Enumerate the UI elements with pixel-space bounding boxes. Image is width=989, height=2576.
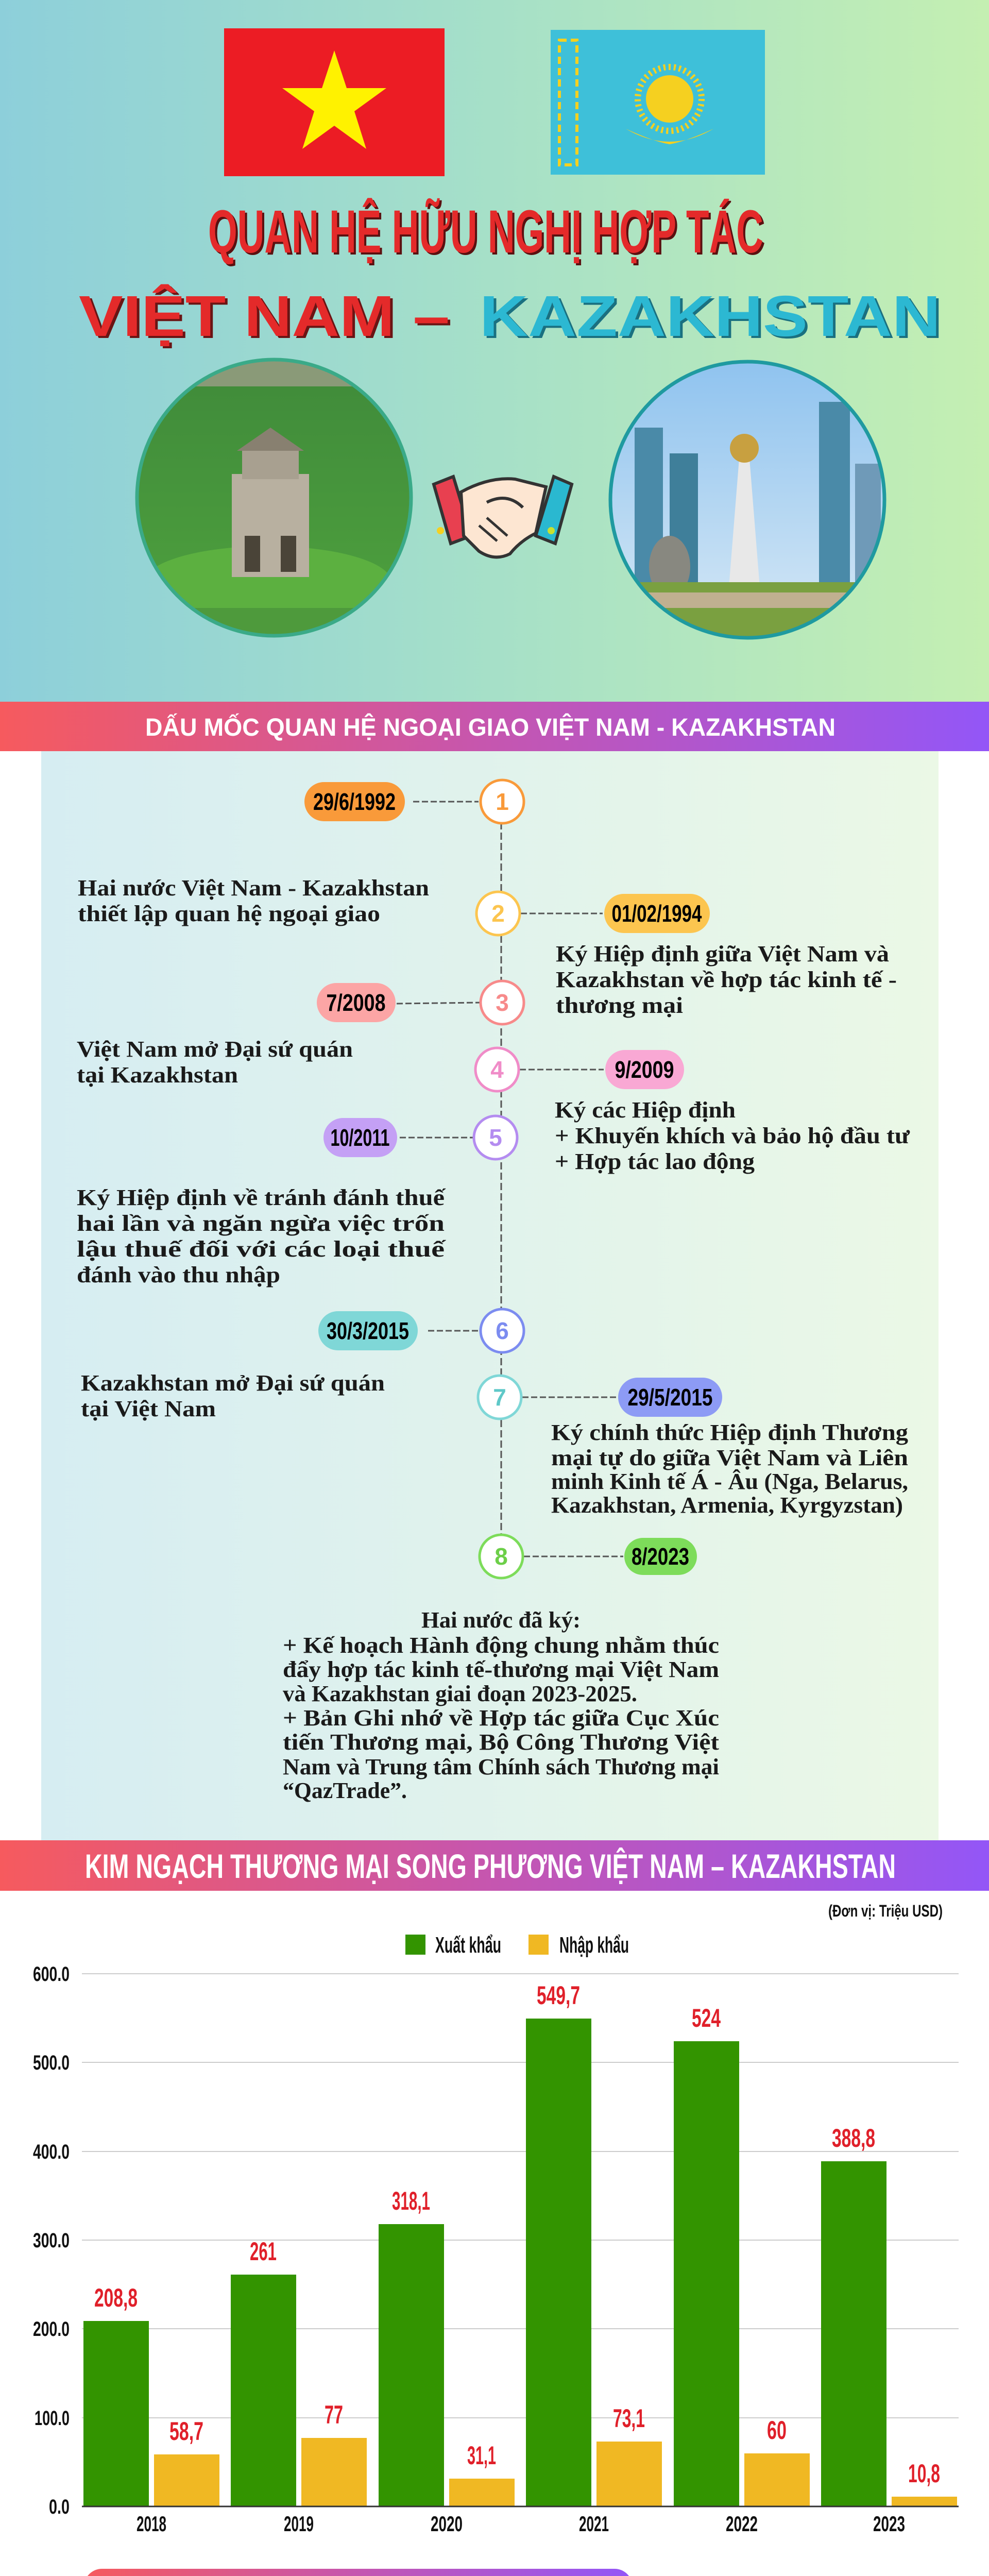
milestone 2 — [476, 892, 897, 1018]
milestone 8: + Kế hoạch Hành động chung nhằm thúc — [283, 1633, 719, 1658]
legend: Nhập khẩu — [559, 1933, 629, 1958]
bar chart: trade: 600.0 — [33, 1963, 70, 1986]
milestone 8: tiến Thương mại, Bộ Công Thương Việt — [283, 1730, 719, 1755]
title line 2 — [79, 284, 943, 350]
milestone 1: 1 — [496, 788, 509, 815]
header band: trade — [0, 1840, 989, 1891]
bar chart: trade: 549,7 — [537, 1981, 580, 2010]
milestone 2: Kazakhstan về hợp tác kinh tế - — [556, 967, 897, 992]
background: header gradient — [0, 0, 989, 702]
bar chart: trade: 2018 — [137, 2512, 166, 2536]
milestone 1 — [78, 780, 524, 926]
milestone 4: 4 — [490, 1056, 504, 1083]
milestone 7 — [478, 1376, 908, 1518]
milestone 8: 8/2023 — [632, 1543, 689, 1570]
bar chart: trade: 2020 — [431, 2512, 463, 2536]
bar chart: trade: 2019 — [284, 2512, 314, 2536]
milestone 3: 7/2008 — [327, 989, 385, 1016]
header band: milestones — [0, 702, 989, 751]
milestone 3: Việt Nam mở Đại sứ quán — [77, 1037, 353, 1062]
milestone 8: “QazTrade”. — [283, 1778, 407, 1803]
bar chart: trade: 388,8 — [832, 2124, 875, 2153]
bar chart: trade: 200.0 — [33, 2318, 70, 2341]
milestone 2: thương mại — [556, 993, 683, 1018]
milestone 8 — [283, 1535, 719, 1803]
milestone 1: 29/6/1992 — [313, 788, 396, 815]
milestone 7: minh Kinh tế Á - Âu (Nga, Belarus, — [551, 1469, 908, 1494]
photo: Astana skyline — [608, 361, 889, 639]
milestone 5: đánh vào thu nhập — [77, 1262, 280, 1287]
bar chart: trade: 60 — [767, 2416, 787, 2445]
milestone 4: 9/2009 — [615, 1056, 674, 1083]
photo: Hoan Kiem lake — [134, 355, 415, 649]
milestone 3: 3 — [496, 989, 509, 1016]
milestone 4: + Khuyến khích và bảo hộ đầu tư — [555, 1123, 910, 1148]
milestone 5 — [77, 1116, 517, 1287]
milestone 7: mại tự do giữa Việt Nam và Liên — [551, 1445, 908, 1470]
bar chart: trade: 0.0 — [49, 2496, 70, 2518]
header band: milestones: DẤU MỐC QUAN HỆ NGOẠI GIAO VIỆT NAM - KAZAKHSTAN — [145, 713, 835, 741]
milestone 1: thiết lập quan hệ ngoại giao — [78, 901, 380, 926]
milestone 5: Ký Hiệp định về tránh đánh thuế — [77, 1185, 446, 1210]
bar chart: trade: 10,8 — [908, 2459, 940, 2488]
milestone 8: đẩy hợp tác kinh tế-thương mại Việt Nam — [283, 1657, 719, 1682]
bar chart: trade: 318,1 — [392, 2187, 430, 2215]
milestone 7: 7 — [493, 1384, 506, 1411]
milestone 8: Hai nước đã ký: — [421, 1607, 581, 1633]
flag: Vietnam — [224, 28, 445, 176]
milestone 5: 10/2011 — [331, 1124, 389, 1151]
panel: timeline — [41, 751, 939, 1840]
milestone 6: 6 — [496, 1317, 509, 1344]
legend: Xuất khẩu — [435, 1933, 501, 1958]
milestone 6: Kazakhstan mở Đại sứ quán — [81, 1370, 385, 1396]
title line 2: KAZAKHSTAN — [482, 286, 943, 350]
bar chart: trade: (Đơn vị: Triệu USD) — [828, 1902, 943, 1920]
milestone 1: Hai nước Việt Nam - Kazakhstan — [78, 875, 429, 901]
title line 2: VIỆT NAM – — [81, 286, 452, 350]
milestone 6: 30/3/2015 — [327, 1317, 409, 1344]
bar chart: trade — [33, 1902, 959, 2536]
milestone 8: và Kazakhstan giai đoạn 2023-2025. — [283, 1681, 637, 1706]
bar chart: trade: 2022 — [726, 2512, 758, 2536]
milestone 2: 01/02/1994 — [612, 900, 702, 927]
bar chart: trade: 524 — [692, 2004, 721, 2032]
milestone 6: tại Việt Nam — [81, 1396, 216, 1421]
bar chart: trade: 58,7 — [169, 2417, 203, 2446]
milestone 7: Kazakhstan, Armenia, Kyrgyzstan) — [551, 1493, 903, 1518]
bar chart: trade: 300.0 — [33, 2229, 70, 2252]
milestone 5: hai lần và ngăn ngừa việc trốn — [77, 1211, 445, 1236]
panel: exports — [42, 2569, 975, 2576]
milestone 8: 8 — [494, 1543, 508, 1570]
milestone 8: + Bản Ghi nhớ về Hợp tác giữa Cục Xúc — [283, 1705, 719, 1731]
bar chart: trade: 400.0 — [33, 2141, 70, 2163]
milestone 2: Ký Hiệp định giữa Việt Nam và — [556, 941, 889, 967]
milestone 4 — [475, 1048, 910, 1174]
bar chart: trade: 208,8 — [94, 2283, 138, 2312]
bar chart: trade: 31,1 — [467, 2441, 496, 2470]
pill: exports heading — [84, 2569, 633, 2576]
bar chart: trade: 100.0 — [35, 2407, 70, 2430]
bar chart: trade: 77 — [325, 2400, 343, 2429]
milestone 4: Ký các Hiệp định — [555, 1097, 736, 1123]
milestone 3 — [77, 981, 524, 1088]
title line 1 — [208, 197, 765, 268]
bar chart: trade: 2021 — [579, 2512, 609, 2536]
milestone 2: 2 — [491, 900, 505, 927]
title line 2: KAZAKHSTAN — [480, 284, 941, 348]
flag: Kazakhstan — [551, 30, 765, 175]
bar chart: trade: 500.0 — [33, 2052, 70, 2074]
bar chart: trade: 2023 — [873, 2512, 905, 2536]
milestone 3: tại Kazakhstan — [77, 1062, 238, 1088]
milestone 4: + Hợp tác lao động — [555, 1149, 755, 1174]
bar chart: trade: 73,1 — [613, 2404, 645, 2433]
icon: handshake — [434, 477, 572, 557]
legend — [405, 1933, 629, 1958]
title line 2: VIỆT NAM – — [79, 284, 450, 348]
bar chart: trade: 261 — [250, 2237, 277, 2266]
milestone 8: Nam và Trung tâm Chính sách Thương mại — [283, 1754, 719, 1780]
milestone 7: Ký chính thức Hiệp định Thương — [551, 1420, 908, 1445]
milestone 7: 29/5/2015 — [627, 1384, 713, 1411]
milestone 6 — [81, 1309, 524, 1421]
milestone 5: 5 — [489, 1124, 502, 1151]
milestone 5: lậu thuế đối với các loại thuế — [77, 1236, 446, 1262]
